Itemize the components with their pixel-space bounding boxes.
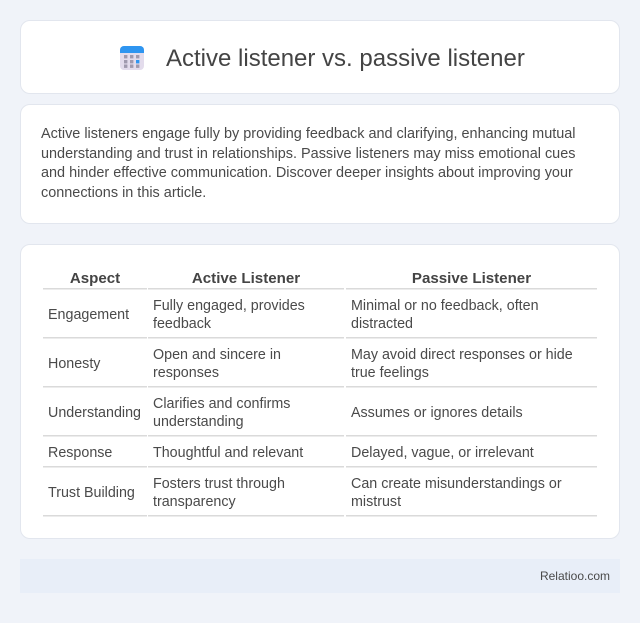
table: responses [153,365,219,381]
footer credit: Relatioo.com [540,569,610,583]
intro text: connections in this article. [41,185,206,201]
table: true feelings [351,365,429,381]
intro text: and hinder effective communication. Discover deeper insights about improving your [41,165,573,181]
table: Trust Building [48,485,135,501]
table: Can create misunderstandings or [351,476,562,492]
table: Thoughtful and relevant [153,445,303,461]
table: Passive Listener [412,270,531,287]
table: Minimal or no feedback, often [351,298,539,314]
intro text [41,126,576,201]
table: Aspect [70,270,120,287]
table: mistrust [351,494,401,510]
table: Open and sincere in [153,347,281,363]
footer bar [20,559,620,593]
table: Understanding [48,405,141,421]
table [43,270,597,517]
table: Engagement [48,307,129,323]
table: Assumes or ignores details [351,405,523,421]
table: Response [48,445,112,461]
title card [20,20,620,94]
table: May avoid direct responses or hide [351,347,573,363]
comparison table card [20,244,620,539]
table: Fosters trust through [153,476,285,492]
table: Fully engaged, provides [153,298,305,314]
table: Active Listener [192,270,300,287]
intro card [20,104,620,224]
intro text: understanding and trust in relationships. Passive listeners may miss emotional cues [41,146,575,162]
title: Active listener vs. passive listener [166,45,525,72]
intro text: Active listeners engage fully by providing feedback and clarifying, enhancing mutual [41,126,576,142]
table: transparency [153,494,236,510]
table: Clarifies and confirms [153,396,290,412]
table: Delayed, vague, or irrelevant [351,445,534,461]
table: feedback [153,316,211,332]
table: Honesty [48,356,100,372]
icon: calendar [120,46,144,70]
table: distracted [351,316,413,332]
table: understanding [153,414,244,430]
